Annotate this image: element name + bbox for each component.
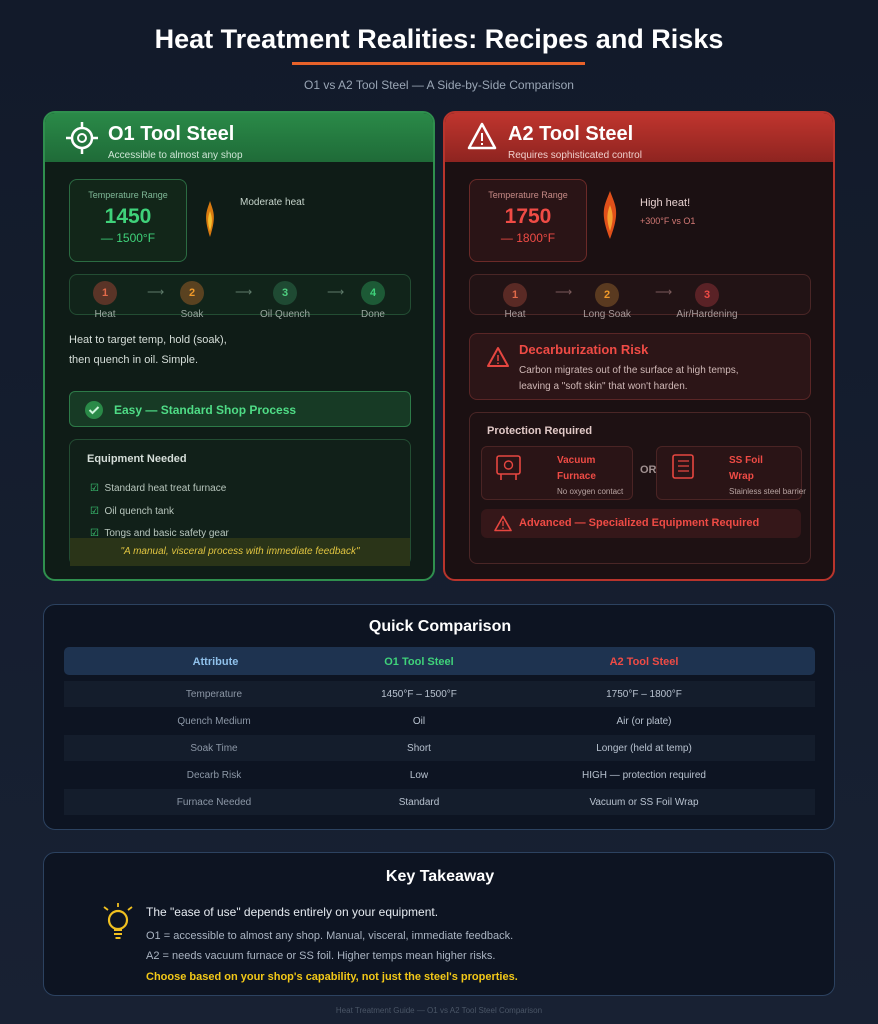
- process steps: Oil Quench: [260, 309, 310, 320]
- process steps: ⟶: [147, 285, 164, 299]
- table: Standard: [399, 797, 439, 808]
- panel: A2: +300°F vs O1: [640, 216, 695, 226]
- decarb risk: Carbon migrates out of the surface at high temps,: [519, 365, 739, 376]
- process steps: 2: [604, 289, 610, 301]
- temperature box: Temperature Range: [88, 190, 168, 200]
- icon: flame: [604, 191, 616, 239]
- temperature box: 1450: [105, 205, 151, 228]
- footer: Heat Treatment Guide — O1 vs A2 Tool Steel Comparison: [336, 1006, 542, 1015]
- description: Heat to target temp, hold (soak),: [69, 334, 227, 346]
- panel: quick comparison: [43, 604, 835, 830]
- process steps: 1: [102, 287, 108, 299]
- table: Temperature: [186, 689, 242, 700]
- panel: key takeaway: Key Takeaway: [386, 868, 494, 885]
- protection required: OR: [640, 464, 656, 476]
- panel: A2: High heat!: [640, 197, 690, 209]
- process steps: ⟶: [235, 285, 252, 299]
- temperature box: Temperature Range: [488, 190, 568, 200]
- process steps: [469, 274, 811, 315]
- icon: target: [66, 122, 98, 154]
- icon: warning: [468, 122, 496, 150]
- O1 header: [45, 113, 437, 162]
- equipment list: ☑ Oil quench tank: [90, 506, 174, 516]
- protection required: [469, 412, 811, 564]
- table: Quench Medium: [177, 716, 251, 727]
- process steps: ⟶: [555, 285, 572, 299]
- process steps: Heat: [504, 309, 526, 320]
- icon: lightbulb: [104, 903, 132, 939]
- option: foil wrap: SS Foil: [729, 455, 763, 466]
- panel: key takeaway: O1 = accessible to almost any shop. Manual, visceral, immediate feedback.: [146, 930, 513, 942]
- table: Short: [407, 743, 431, 754]
- process steps: 1: [512, 289, 518, 301]
- table: Soak Time: [190, 743, 238, 754]
- process steps: Air/Hardening: [676, 309, 738, 320]
- panel: key takeaway: Choose based on your shop's capability, not just the steel's properties.: [146, 971, 518, 983]
- A2 header: Requires sophisticated control: [508, 150, 642, 161]
- option: vacuum furnace: Vacuum: [557, 455, 595, 466]
- title: Heat Treatment Realities: Recipes and Risks: [155, 24, 723, 54]
- equipment list: ☑ Tongs and basic safety gear: [90, 528, 229, 539]
- temperature box: 1750: [505, 205, 551, 228]
- badge: advanced: [481, 509, 801, 538]
- O1 header: O1 Tool Steel: [108, 123, 234, 145]
- equipment list: Equipment Needed: [87, 453, 187, 465]
- A2 header: A2 Tool Steel: [508, 123, 633, 145]
- protection required: Protection Required: [487, 425, 592, 437]
- table: Vacuum or SS Foil Wrap: [589, 797, 699, 808]
- table: Attribute: [193, 656, 238, 668]
- option: foil wrap: Wrap: [729, 471, 754, 482]
- O1 header: Accessible to almost any shop: [108, 150, 243, 161]
- decarb risk: Decarburization Risk: [519, 342, 648, 357]
- option: vacuum furnace: [481, 446, 633, 500]
- badge: easy: [69, 391, 411, 427]
- badge: easy: Easy — Standard Shop Process: [114, 403, 296, 417]
- equipment list: ☑ Standard heat treat furnace: [90, 483, 226, 494]
- panel: key takeaway: [43, 852, 835, 996]
- table: Longer (held at temp): [596, 743, 692, 754]
- quote: [70, 538, 410, 566]
- option: foil wrap: [656, 446, 802, 500]
- decarb risk: [469, 333, 811, 400]
- badge: advanced: Advanced — Specialized Equipment Required: [519, 517, 759, 529]
- description: [69, 334, 227, 366]
- table: Oil: [413, 716, 425, 727]
- process steps: Done: [361, 309, 385, 320]
- panel: O1: Moderate heat: [240, 197, 304, 208]
- process steps: 4: [370, 287, 376, 299]
- panel: O1: [43, 111, 435, 581]
- panel: key takeaway: A2 = needs vacuum furnace or SS foil. Higher temps mean higher risks.: [146, 950, 495, 962]
- quote: "A manual, visceral process with immediate feedback": [120, 546, 360, 557]
- table: O1 Tool Steel: [384, 656, 454, 668]
- process steps: Long Soak: [583, 309, 631, 320]
- option: vacuum furnace: No oxygen contact: [557, 487, 623, 496]
- temperature box: — 1800°F: [501, 231, 555, 245]
- A2 header: [445, 113, 837, 162]
- subtitle: O1 vs A2 Tool Steel — A Side-by-Side Comparison: [304, 78, 574, 92]
- icon: flame: [206, 201, 214, 237]
- table: Air (or plate): [616, 716, 672, 727]
- temperature box: — 1500°F: [101, 231, 155, 245]
- takeaway text: The "ease of use" depends entirely on your equipment.: [146, 905, 438, 919]
- table: A2 Tool Steel: [610, 656, 678, 668]
- option: vacuum furnace: Furnace: [557, 471, 596, 482]
- table: Decarb Risk: [187, 770, 241, 781]
- equipment list: [69, 439, 411, 566]
- temperature box: [69, 179, 187, 262]
- process steps: 3: [704, 289, 710, 301]
- process steps: ⟶: [327, 285, 344, 299]
- table: [64, 647, 815, 815]
- panel: A2: [443, 111, 835, 581]
- temperature box: [469, 179, 587, 262]
- table: HIGH — protection required: [582, 770, 706, 781]
- process steps: [69, 274, 411, 315]
- process steps: Soak: [181, 309, 203, 320]
- table: 1750°F – 1800°F: [606, 689, 682, 700]
- decarb risk: leaving a "soft skin" that won't harden.: [519, 381, 688, 392]
- table: 1450°F – 1500°F: [381, 689, 457, 700]
- process steps: 3: [282, 287, 288, 299]
- table: Low: [410, 770, 428, 781]
- option: foil wrap: Stainless steel barrier: [729, 487, 806, 496]
- process steps: ⟶: [655, 285, 672, 299]
- description: then quench in oil. Simple.: [69, 354, 198, 366]
- process steps: Heat: [94, 309, 116, 320]
- process steps: 2: [189, 287, 195, 299]
- table: Furnace Needed: [177, 797, 251, 808]
- table title: Quick Comparison: [369, 618, 511, 635]
